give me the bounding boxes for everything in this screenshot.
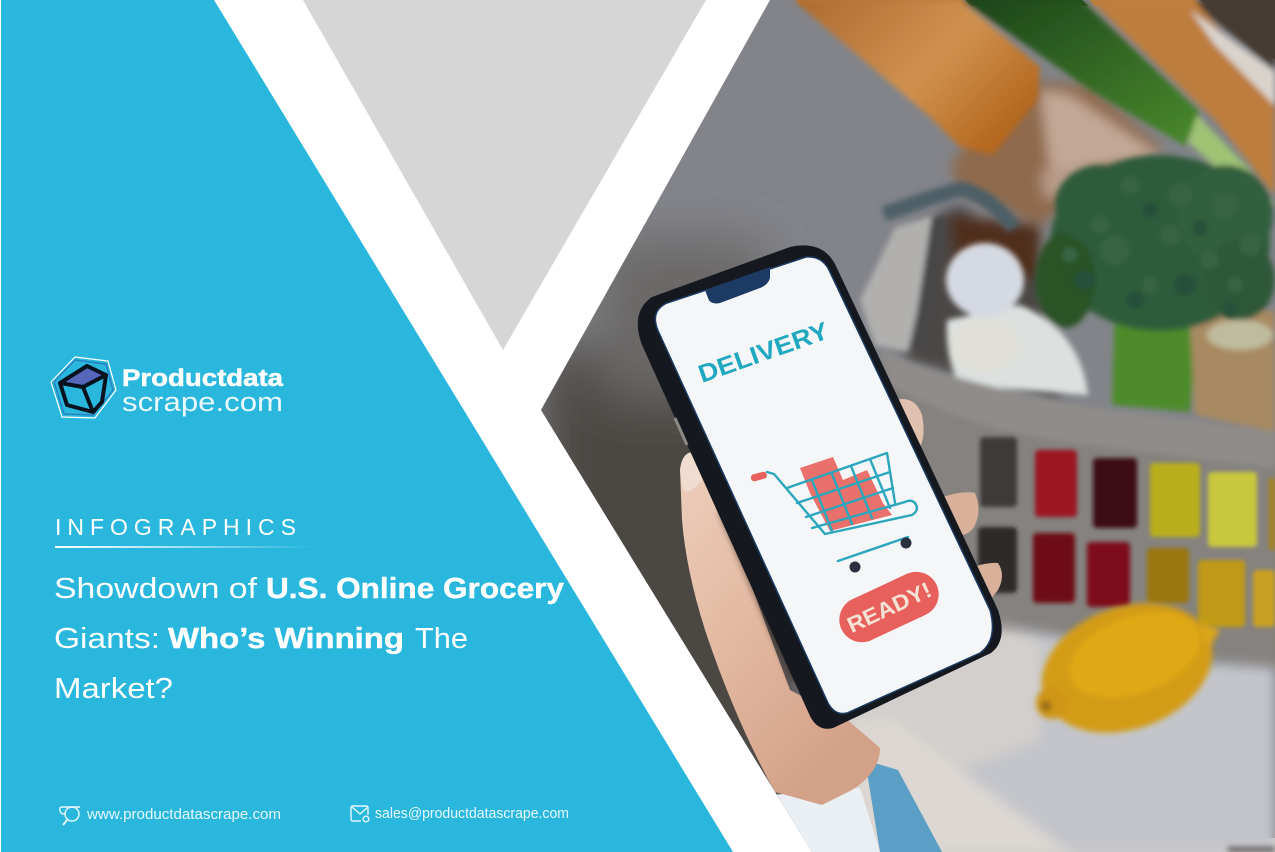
title: Giants:	[54, 623, 160, 655]
table	[959, 624, 1275, 849]
email address: sales@productdatascrape.com	[375, 806, 569, 822]
title	[54, 573, 564, 705]
milk bottle cap	[946, 243, 1024, 317]
icon: web search	[60, 807, 80, 825]
READY badge	[839, 572, 939, 642]
title: The	[415, 623, 468, 655]
phone notch	[705, 267, 770, 303]
sleeve	[770, 788, 880, 852]
rear basket interior	[905, 205, 1060, 400]
broccoli stem	[1108, 320, 1196, 415]
title: Showdown of	[54, 573, 258, 605]
loaf right	[1090, 0, 1275, 195]
photo backdrop wall	[541, 0, 1275, 852]
floor beneath table	[840, 717, 1075, 852]
photo: hand holding phone over grocery basket	[541, 0, 1275, 852]
lemon	[1037, 599, 1216, 738]
side button	[675, 418, 687, 445]
broccoli head	[1050, 155, 1270, 331]
sharp edge underlay at bottom	[878, 838, 1275, 852]
broccoli florets	[1062, 176, 1261, 317]
footer: email	[351, 806, 569, 822]
milk bottle body	[947, 305, 1088, 395]
phone screen	[655, 257, 992, 714]
title: Market?	[54, 673, 173, 705]
logo icon: hexagon cube	[51, 357, 116, 418]
basket handle	[884, 189, 1014, 228]
sharp edge underlay at top and right	[796, 0, 968, 6]
hand behind phone	[680, 399, 1002, 805]
phone body	[638, 245, 1002, 729]
brown produce	[1190, 310, 1275, 432]
blurred groceries scene	[541, 0, 1275, 852]
shopping cart icon	[750, 453, 917, 572]
logo wordmark: Productdata: Productdata	[122, 365, 284, 392]
logo	[51, 357, 284, 418]
footer: website	[60, 807, 281, 825]
panel: blue title panel	[1, 0, 733, 852]
basket body	[898, 396, 1269, 664]
phone	[638, 245, 1002, 729]
title: U.S. Online Grocery	[266, 573, 564, 605]
eyebrow: INFOGRAPHICS: INFOGRAPHICS	[55, 514, 296, 540]
icon: mail search	[351, 806, 369, 822]
basket left wall	[860, 213, 937, 352]
eyebrow underline	[55, 546, 315, 548]
green onion	[962, 0, 1200, 146]
decorative grey triangle	[303, 0, 706, 350]
phone label: DELIVERY: DELIVERY	[695, 317, 833, 389]
title: Who’s Winning	[168, 623, 404, 655]
READY label: READY!	[843, 577, 935, 638]
jeans	[865, 760, 942, 852]
website address: www.productdatascrape.com	[86, 807, 281, 823]
table shadow	[1228, 847, 1275, 852]
paper bag	[950, 80, 1165, 225]
cloth	[1190, 10, 1275, 106]
loaf left	[793, 0, 1040, 155]
logo wordmark: scrape.com: scrape.com	[122, 387, 283, 417]
basket holes and produce	[978, 437, 1275, 627]
